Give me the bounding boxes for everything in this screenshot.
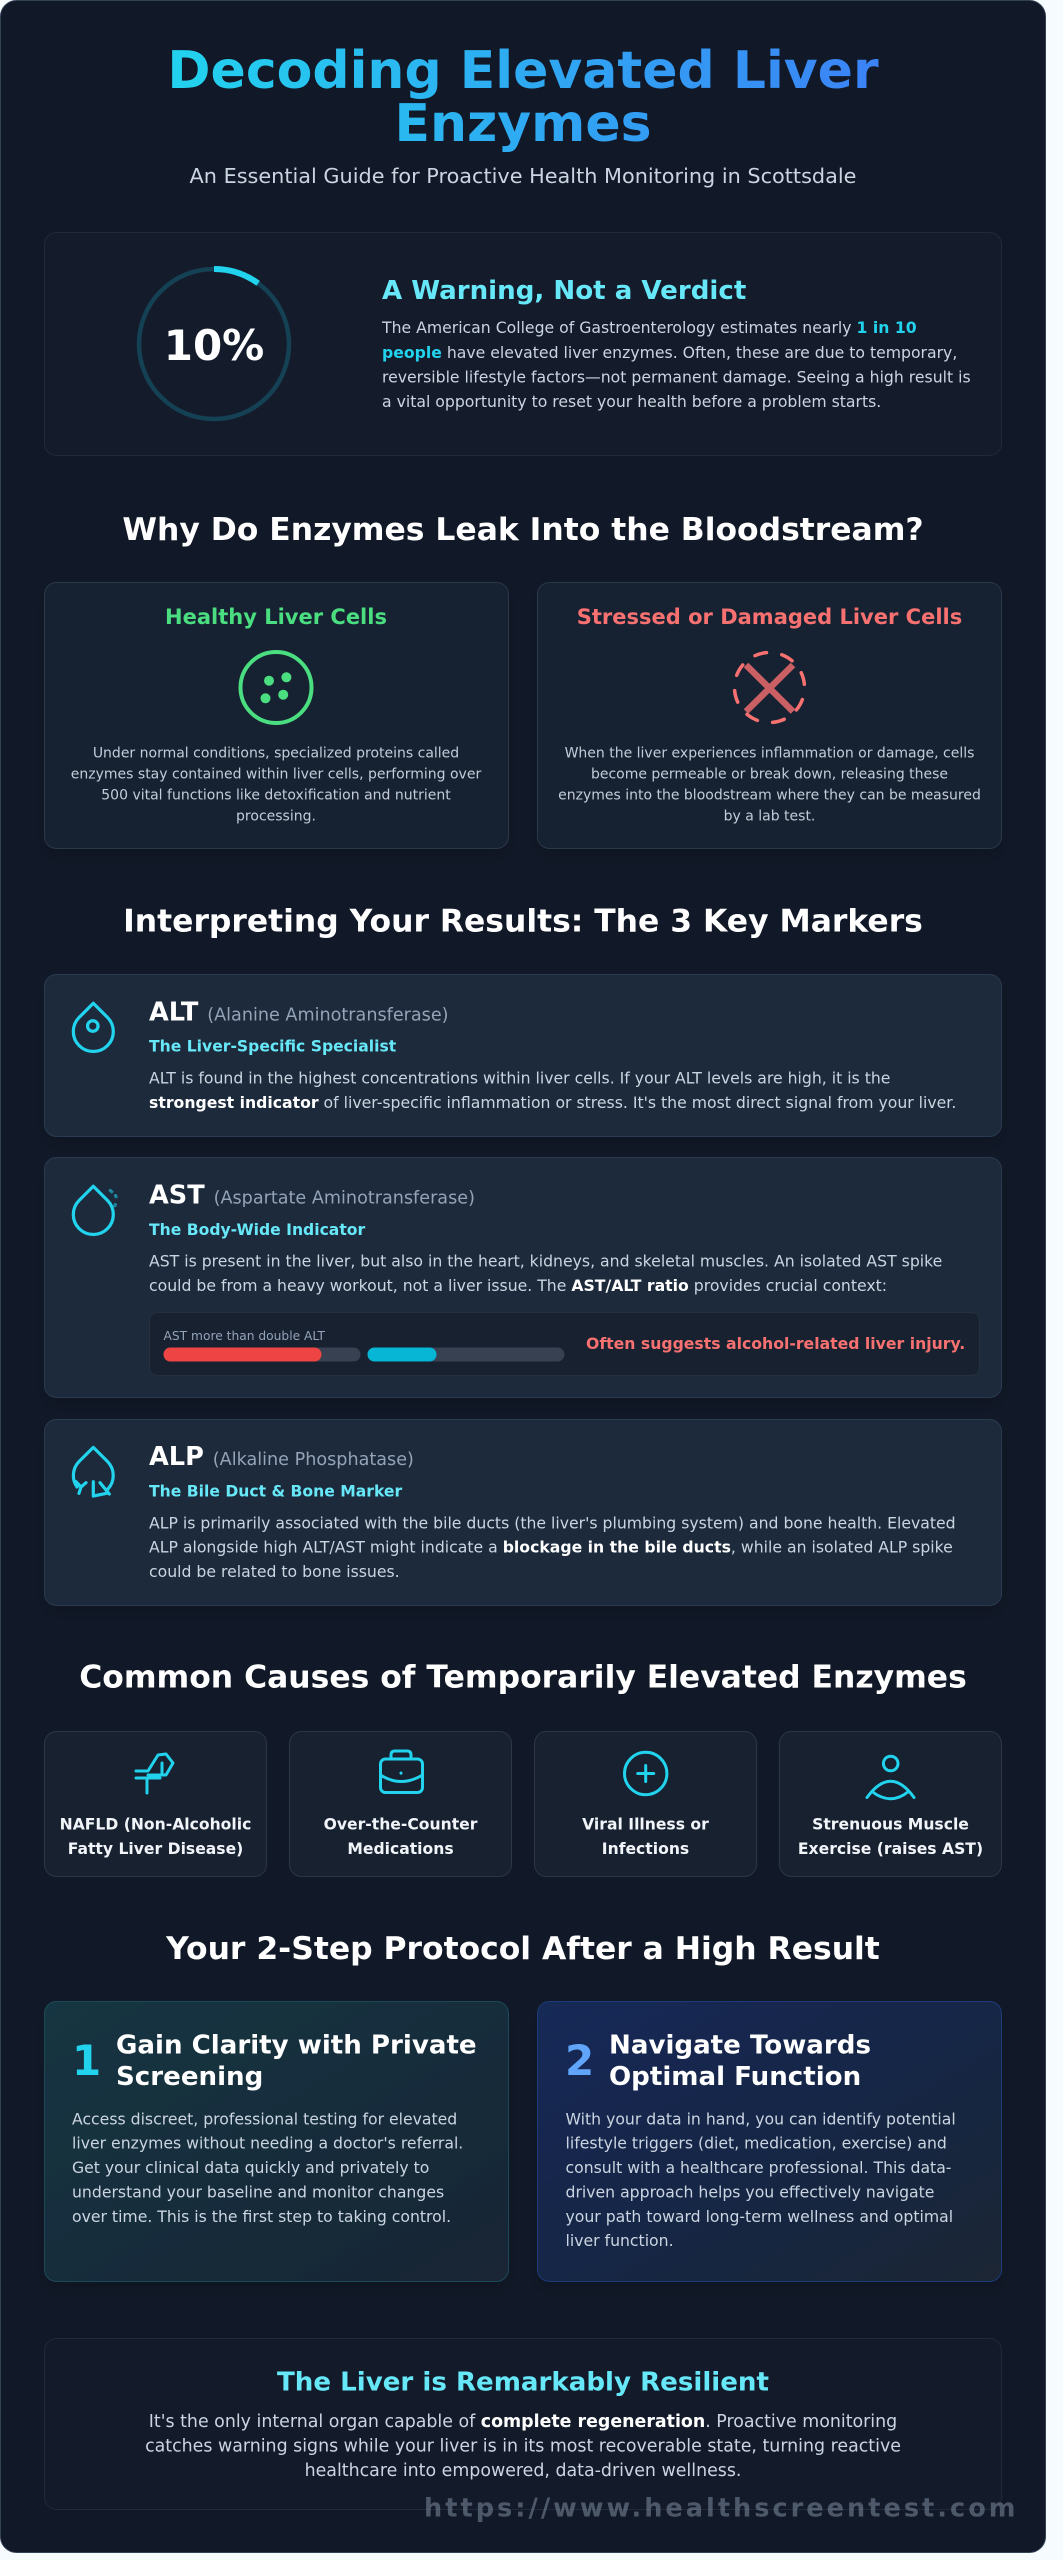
- panel: muscle exercise cause: [780, 1732, 1002, 1876]
- marker heading: AST: AST (Aspartate Aminotransferase): [149, 1180, 475, 1210]
- text block: ALP: ALP alongside high ALT/AST might indicate a blockage in the bile ducts, while an isolated ALP spike: [149, 1538, 953, 1557]
- cause label: medications: [324, 1815, 478, 1858]
- panel heading: damaged: Stressed or Damaged Liver Cells: [577, 605, 962, 629]
- text block: ALT: [149, 1068, 956, 1112]
- text block: warning body: a vital opportunity to reset your health before a problem starts.: [382, 392, 881, 411]
- text block: step 1: liver enzymes without needing a doctor's referral.: [72, 2134, 463, 2153]
- icon: plus in circle: [624, 1752, 667, 1795]
- cause label: NAFLD: [60, 1815, 251, 1858]
- icon: NAFLD: [136, 1754, 173, 1793]
- text block: warning body: reversible lifestyle factors—not permanent damage. Seeing a high result is: [382, 368, 971, 386]
- title: [167, 41, 879, 154]
- chart: 10 percent ring: [139, 269, 289, 419]
- text block: step 2: consult with a healthcare professional. This data-: [566, 2158, 951, 2177]
- text block: step 2: driven approach helps you effectively navigate: [566, 2182, 934, 2202]
- text block: resilient: healthcare into empowered, data-driven wellness.: [305, 2461, 741, 2481]
- panel: healthy liver cells: [44, 582, 508, 848]
- callout: AST/ALT ratio bars: AST more than double ALT: [164, 1329, 326, 1343]
- marker heading: ALT: ALT (Alanine Aminotransferase): [149, 998, 449, 1028]
- title: Decoding Elevated Liver: [167, 41, 879, 101]
- title: Enzymes: [394, 94, 652, 154]
- step heading 1: [116, 2031, 477, 2092]
- text block: step 1: Access discreet, professional testing for elevated: [72, 2109, 457, 2128]
- text block: healthy: [71, 745, 481, 824]
- bar chart: ALT bar: [368, 1348, 564, 1362]
- step heading 2: Navigate Towards: [609, 2031, 871, 2061]
- text block: warning body: The American College of Gastroenterology estimates nearly 1 in 10: [381, 318, 917, 337]
- cause label: medications: Medications: [347, 1840, 454, 1858]
- panel: stressed or damaged liver cells: [538, 582, 1002, 848]
- text block: AST: could be from a heavy workout, not a liver issue. The AST/ALT ratio provides crucial context:: [149, 1276, 887, 1295]
- text block: warning body: [381, 318, 971, 411]
- marker subtitle: ALT: The Liver-Specific Specialist: [149, 1038, 397, 1056]
- text block: ALP: ALP is primarily associated with the bile ducts (the liver's plumbing system) and bone health. Elevated: [149, 1513, 956, 1532]
- cause label: viral: [582, 1815, 709, 1858]
- heading: common causes: Common Causes of Temporarily Elevated Enzymes: [79, 1659, 967, 1695]
- panel: AST marker: [44, 1158, 1002, 1398]
- bar chart: AST bar: [164, 1348, 360, 1362]
- heading: 2-step protocol: Your 2-Step Protocol After a High Result: [165, 1931, 880, 1967]
- heading: why enzymes leak: Why Do Enzymes Leak Into the Bloodstream?: [122, 512, 924, 548]
- cause label: medications: Over-the-Counter: [324, 1815, 478, 1833]
- marker heading: ALP: ALP (Alkaline Phosphatase): [149, 1442, 414, 1472]
- step heading 1: Screening: [116, 2062, 263, 2092]
- text block: step 1: over time. This is the first step to taking control.: [72, 2207, 451, 2226]
- heading: key markers: Interpreting Your Results: The 3 Key Markers: [123, 904, 923, 940]
- callout: AST/ALT ratio bars: Often suggests alcohol-related liver injury.: [586, 1334, 965, 1353]
- cause label: exercise: Strenuous Muscle: [812, 1815, 969, 1833]
- panel: NAFLD cause: [44, 1732, 266, 1876]
- text block: warning body: people have elevated liver enzymes. Often, these are due to temporary,: [382, 343, 957, 362]
- icon: healthy cell: [240, 652, 312, 723]
- text block: damaged: [558, 745, 981, 824]
- text block: healthy: enzymes stay contained within liver cells, performing over: [71, 766, 481, 782]
- cause label: viral: Viral Illness or: [582, 1815, 709, 1833]
- text block: step 1: Get your clinical data quickly and privately to: [72, 2158, 429, 2177]
- step number 2: 2: [565, 2036, 594, 2085]
- callout: AST/ALT ratio bars: [150, 1312, 980, 1376]
- text block: ALP: [149, 1513, 956, 1581]
- cause label: viral: Infections: [602, 1840, 689, 1858]
- text block: healthy: Under normal conditions, specialized proteins called: [93, 745, 459, 761]
- subtitle: An Essential Guide for Proactive Health Monitoring in Scottsdale: [190, 164, 856, 188]
- text block: ALT: strongest indicator of liver-specific inflammation or stress. It's the most direct signal from your liver.: [149, 1093, 956, 1112]
- text block: AST: AST is present in the liver, but also in the heart, kidneys, and skeletal muscles. An isolated AST spike: [149, 1252, 942, 1271]
- panel: ALP marker: [44, 1420, 1002, 1606]
- step number 1: 1: [72, 2036, 101, 2085]
- panel: viral illness cause: [534, 1732, 756, 1876]
- text block: healthy: 500 vital functions like detoxification and nutrient: [101, 787, 451, 803]
- step heading 2: Optimal Function: [609, 2062, 861, 2092]
- text block: step 1: understand your baseline and monitor changes: [72, 2182, 444, 2202]
- icon: medication case: [380, 1751, 422, 1792]
- cause label: exercise: Exercise (raises AST): [798, 1840, 983, 1858]
- text block: resilient: catches warning signs while your liver is in its most recoverable state, turning reactive: [145, 2436, 901, 2456]
- panel: resilient liver: [44, 2338, 1002, 2510]
- text block: step 1: [72, 2109, 463, 2226]
- text block: step 2: [566, 2109, 956, 2250]
- panel heading: healthy: Healthy Liver Cells: [165, 605, 387, 629]
- text block: step 2: your path toward long-term wellness and optimal: [566, 2207, 953, 2226]
- icon: person exercising: [867, 1756, 914, 1799]
- panel: medications cause: [290, 1732, 512, 1876]
- panel: step 1: [44, 2002, 508, 2282]
- panel: ALT marker: [44, 974, 1002, 1136]
- icon: ALP droplet with ducts: [73, 1447, 113, 1496]
- marker subtitle: ALP: The Bile Duct & Bone Marker: [149, 1483, 402, 1501]
- text block: ALT: ALT is found in the highest concentrations within liver cells. If your ALT levels are high, it is the: [149, 1068, 890, 1087]
- icon: damaged cell: [723, 641, 816, 734]
- text block: step 2: With your data in hand, you can identify potential: [566, 2109, 956, 2128]
- text block: AST: [149, 1252, 942, 1295]
- text block: resilient: It's the only internal organ capable of complete regeneration. Proactive monitoring: [149, 2412, 897, 2432]
- icon: ALT droplet: [73, 1003, 113, 1052]
- text block: damaged: When the liver experiences inflammation or damage, cells: [565, 745, 974, 761]
- cause label: NAFLD: Fatty Liver Disease): [68, 1840, 243, 1858]
- text block: damaged: enzymes into the bloodstream where they can be measured: [558, 787, 981, 803]
- panel: a warning, not a verdict: [44, 232, 1002, 456]
- text block: ALP: could be related to bone issues.: [149, 1562, 400, 1581]
- text block: damaged: become permeable or break down, releasing these: [591, 766, 948, 782]
- text block: step 2: lifestyle triggers (diet, medication, exercise) and: [566, 2134, 947, 2153]
- icon: AST droplet: [73, 1186, 116, 1235]
- text block: resilient: [145, 2412, 901, 2481]
- step heading 1: Gain Clarity with Private: [116, 2031, 477, 2061]
- text block: healthy: processing.: [236, 808, 316, 824]
- text block: damaged: by a lab test.: [724, 808, 815, 824]
- panel: step 2: [538, 2002, 1002, 2282]
- watermark url: https://www.healthscreentest.com: [424, 2494, 1018, 2524]
- step heading 2: [609, 2031, 871, 2092]
- heading: resilient: The Liver is Remarkably Resilient: [277, 2367, 769, 2397]
- chart: 10 percent ring: 10%: [164, 321, 264, 370]
- text block: step 2: liver function.: [566, 2231, 674, 2250]
- marker subtitle: AST: The Body-Wide Indicator: [149, 1221, 365, 1239]
- cause label: NAFLD: NAFLD (Non-Alcoholic: [60, 1815, 251, 1833]
- cause label: exercise: [798, 1815, 983, 1858]
- heading: warning: A Warning, Not a Verdict: [382, 276, 746, 306]
